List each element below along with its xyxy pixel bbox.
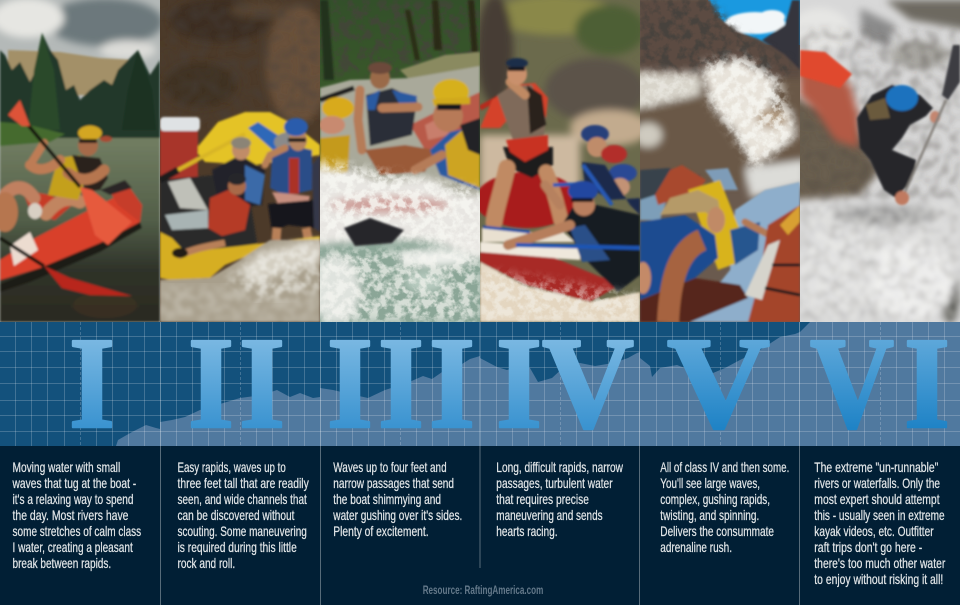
heading: roman numeral IV [496, 311, 634, 456]
text block: class IV description: that requires precise [496, 492, 589, 507]
text block: class II description: seen, and wide channels that [178, 492, 307, 507]
heading: roman numeral III: I [378, 311, 424, 456]
heading: roman numeral VI: V [810, 311, 894, 456]
photo: class V blue raft in big wave [640, 0, 800, 322]
text block: class V description [660, 460, 789, 555]
text block: class II description: is required during this little [178, 540, 297, 555]
text block: class III description: Waves up to four feet and [333, 460, 447, 475]
heading: roman numeral III: I [327, 311, 373, 456]
heading: roman numeral IV: I [496, 311, 542, 456]
chart: rising mountain silhouette [116, 322, 960, 446]
text block: class I description: I water, creating a pleasant [12, 540, 133, 555]
text block: class II description: Easy rapids, waves up to [178, 460, 286, 475]
text block: class I description: it's a relaxing way to spend [12, 492, 134, 507]
text block: class I description [12, 460, 141, 571]
text block: class I description: some stretches of calm class [12, 524, 141, 539]
text block: class III description: the boat shimmying and [333, 492, 441, 507]
heading: roman numeral III [327, 311, 475, 456]
text block: class VI description: raft trips don't go here - [814, 540, 922, 555]
text block: class II description [178, 460, 309, 571]
text block: class III description [333, 460, 462, 539]
photo: class III splash [310, 0, 650, 332]
text block: class IV description: Long, difficult rapids, narrow [496, 460, 623, 475]
text block: class V description: complex, gushing rapids, [660, 492, 770, 507]
text block: class IV description: passages, turbulent water [496, 476, 613, 491]
text block: class IV description [496, 460, 623, 539]
text block: class IV description: maneuvering and sends [496, 508, 603, 523]
source credit: Resource: RaftingAmerica.com [423, 583, 543, 597]
photo: class I kayaker on calm river [0, 0, 163, 322]
column dividers [160, 322, 800, 605]
heading: roman numeral III: I [429, 311, 475, 456]
text block: class III description: water gushing over it's sides. [333, 508, 462, 523]
text block: class I description: the day. Most rivers have [12, 508, 128, 523]
text block: class III description: narrow passages that send [333, 476, 454, 491]
heading: roman numeral II: I [188, 311, 234, 456]
text block: class V description: Delivers the consummate [660, 524, 774, 539]
band: blueprint panel with river gradient profile [0, 322, 960, 446]
heading: roman numeral VI: I [904, 311, 950, 456]
text block: class II description: can be discovered without [178, 508, 295, 523]
heading: roman numeral V: V [667, 311, 770, 456]
text block: class I description: break between rapids. [12, 556, 111, 571]
text block: class V description: twisting, and spinning. [660, 508, 759, 523]
text block: class II description: scouting. Some maneuvering [178, 524, 307, 539]
text block: class II description: three feet tall that are readily [178, 476, 309, 491]
heading: roman numeral II: I [239, 311, 285, 456]
photo: class IV red raft paddlers [475, 0, 650, 322]
text block: class VI description [814, 460, 946, 587]
text block: class I description: waves that tug at the boat - [12, 476, 136, 491]
text block: class II description: rock and roll. [178, 556, 235, 571]
heading: roman numeral II [188, 311, 285, 456]
text block: class I description: Moving water with small [12, 460, 120, 475]
photo: class VI kayaker in waterfall [790, 0, 960, 323]
heading: roman numeral I: I [69, 311, 115, 456]
photo: class II yellow raft [160, 0, 330, 322]
text block: class V description: adrenaline rush. [660, 540, 732, 555]
text block: class IV description: hearts racing. [496, 524, 558, 539]
panel: dark text band [0, 446, 960, 605]
heading: roman numeral IV: V [542, 311, 634, 456]
heading: roman numeral VI [810, 311, 950, 456]
text block: class III description: Plenty of excitement. [333, 524, 429, 539]
text block: class V description: You'll see large waves, [660, 476, 760, 491]
text block: class V description: All of class IV and then some. [660, 460, 789, 475]
